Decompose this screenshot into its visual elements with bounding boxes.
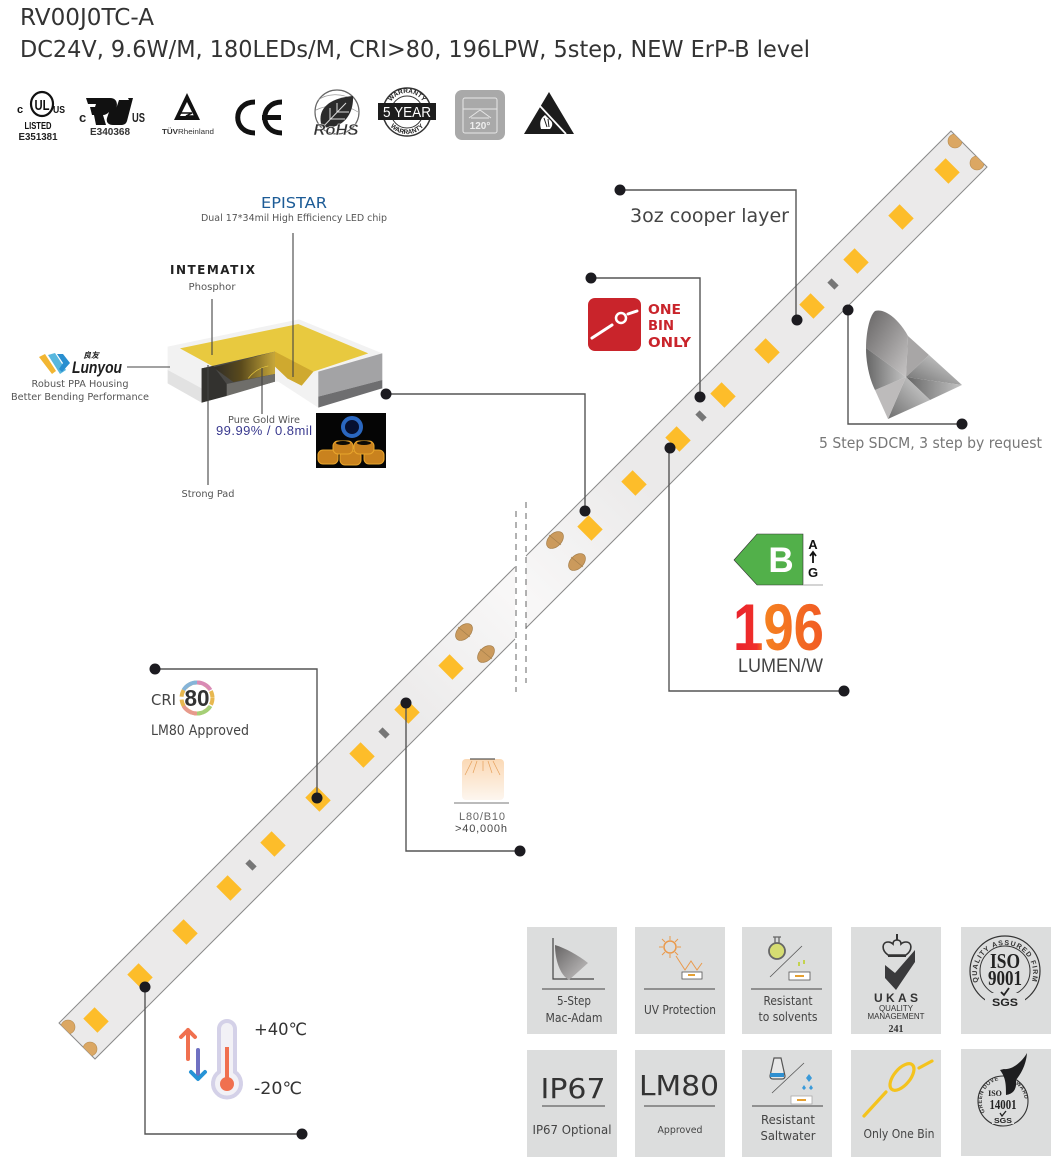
label: Phosphor: Phosphor: [188, 282, 236, 293]
tile: UKAS: [851, 927, 941, 1035]
icon: cRU recognized: US: [132, 110, 145, 125]
callout: LED package cutaway connector: [380, 388, 590, 516]
icon: CE mark: [238, 102, 282, 133]
callout: 3oz copper layer: [614, 184, 802, 326]
callout: lifetime L80/B10: L80/B10: [459, 811, 505, 823]
callout: one bin only: [586, 272, 706, 402]
icon: CRI color ring: [182, 682, 212, 714]
tile: UKAS: UKAS: [874, 991, 918, 1005]
icon: 5 year warranty: WARRANTY: [388, 88, 426, 101]
LED package drawing: [168, 319, 382, 408]
tile: ISO 14001: ISO: [988, 1089, 1002, 1098]
callout: lifetime L80/B10: [400, 698, 526, 856]
tile: IP67: IP67: [540, 1072, 606, 1105]
tile: ISO 14001: GREEN DOVE: [978, 1077, 998, 1114]
tile: IP67: [527, 1050, 617, 1157]
tile: LM80: Approved: [658, 1125, 702, 1136]
label: PPA housing: Robust PPA Housing: [32, 379, 128, 390]
tile: ISO 14001: [961, 1049, 1051, 1156]
icon: cUL listed: E351381: [18, 131, 58, 143]
icon: 5 year warranty: WARRANTY: [391, 123, 422, 134]
icon: energy class B label: [734, 534, 823, 585]
icon: cUL listed: [17, 92, 65, 143]
tile: UKAS: QUALITY: [879, 1004, 914, 1013]
tile: LM80: [635, 1050, 725, 1157]
label: LED chip: Dual 17*34mil High Efficiency LED chip: [201, 213, 387, 224]
logo: Lunyou: [39, 350, 122, 377]
stat: 196: 196: [733, 590, 824, 664]
tiles: feature grid: [527, 927, 1051, 1157]
icon: TUV Rheinland: TÜVRheinland: [162, 127, 214, 136]
callout: operating temperature: +40℃: [254, 1020, 307, 1040]
icon: energy class B label: B: [768, 541, 794, 580]
tile: UKAS: 241: [888, 1024, 904, 1035]
icon: cRU recognized: E340368: [90, 126, 130, 138]
icon: RoHS leaf: RoHS: [314, 122, 359, 139]
image: gold wire spools: [316, 413, 386, 468]
tile: ISO 9001: 9001: [988, 966, 1022, 990]
icon: 5 year warranty: 5 YEAR: [383, 104, 431, 121]
icon: 5 year warranty: [378, 87, 436, 137]
callout: operating temperature: -20℃: [254, 1079, 302, 1099]
tile: resistant saltwater: Resistant: [761, 1113, 815, 1127]
tile: resistant saltwater: [742, 1050, 832, 1157]
icon: RoHS leaf: [314, 90, 359, 139]
icon: light beam box: [462, 759, 504, 800]
label: strong pad: Strong Pad: [182, 489, 234, 500]
icon: TUV Rheinland: [162, 93, 214, 136]
tile: 5-step MacAdam: [527, 927, 617, 1034]
tile: UV protection: UV Protection: [644, 1003, 716, 1017]
icon: one bin red badge: [588, 298, 641, 351]
cut point solder pads: [452, 528, 589, 666]
callout: operating temperature: [140, 982, 308, 1140]
icon: cRU recognized: [79, 98, 145, 138]
tile: ISO 9001: SGS: [992, 997, 1018, 1009]
tile: 5-step MacAdam: Mac-Adam: [546, 1011, 602, 1025]
tile: ISO 9001: QUALITY ASSURED FIRM: [972, 940, 1038, 982]
strip body upper segment: [526, 131, 987, 628]
unit: lumen per watt: LUMEN/W: [738, 656, 823, 677]
icon: thermometer: [213, 1021, 241, 1097]
LED chips: [83, 158, 960, 1033]
callout: SDCM color steps: 5 Step SDCM, 3 step by request: [819, 434, 1042, 452]
label: Epistar: EPISTAR: [261, 194, 327, 212]
icon: energy class B label: A: [808, 537, 818, 552]
end solder pads: [61, 134, 984, 1056]
tile: 5-step MacAdam: 5-Step: [557, 994, 591, 1008]
icon: 120 degree beam angle: [455, 90, 505, 140]
tile: ISO 14001: SGS: [994, 1116, 1012, 1125]
strip body lower segment: [59, 567, 515, 1059]
tile: IP67: IP67 Optional: [532, 1123, 612, 1137]
icon: cRU recognized: c: [79, 110, 86, 125]
label: bending performance: Better Bending Performance: [11, 392, 149, 403]
icon: energy class B label: G: [808, 565, 818, 580]
tile: resistant to solvents: to solvents: [758, 1010, 818, 1024]
logo: Lunyou: 良友: [83, 350, 100, 361]
callout: 3oz copper layer: 3oz cooper layer: [630, 205, 789, 227]
label: gold wire purity: 99.99% / 0.8mil: [216, 423, 312, 438]
callout: SDCM color steps: [819, 304, 1042, 452]
callout: one bin only: ONE: [648, 302, 681, 318]
tile: resistant saltwater: Saltwater: [760, 1129, 816, 1143]
tile: only one bin: [851, 1050, 941, 1157]
leader lines: [127, 233, 293, 485]
tile: only one bin: Only One Bin: [864, 1127, 934, 1141]
tile: ISO 9001: ISO: [990, 949, 1020, 973]
icon: 120 degree beam angle: 120°: [470, 121, 490, 132]
tile: resistant to solvents: Resistant: [764, 994, 813, 1008]
callout: CRI 80: CRI: [151, 691, 176, 709]
subtitle: specification line: DC24V, 9.6W/M, 180LEDs/M, CRI>80, 196LPW, 5step, NEW ErP-B level: [20, 37, 810, 63]
label: Intematix: INTEMATIX: [170, 263, 256, 277]
tile: ISO 9001: [961, 927, 1051, 1034]
tile: UKAS: MANAGEMENT: [868, 1012, 925, 1021]
label: gold wire: Pure Gold Wire: [228, 415, 300, 426]
icon: cUL listed: c: [17, 104, 23, 116]
logo: Lunyou: Lunyou: [72, 358, 122, 377]
tile: resistant to solvents: [742, 927, 832, 1034]
callout: CRI 80: LM80 Approved: [151, 723, 249, 739]
callout: CRI 80: 80: [184, 685, 210, 711]
icon: ESD warning: [524, 92, 574, 134]
icon: up and down arrows: [181, 1030, 205, 1079]
tile: ISO 14001: 14001: [990, 1098, 1016, 1113]
title: model number: RV00J0TC-A: [20, 5, 154, 31]
callout: efficacy: [664, 442, 850, 696]
strip outline: [59, 131, 987, 1059]
callout: one bin only: ONLY: [648, 335, 691, 351]
resistors: [245, 278, 839, 871]
callout: one bin only: BIN: [648, 318, 674, 334]
tile: LM80: LM80: [639, 1069, 719, 1102]
callout: CRI 80: [150, 664, 322, 804]
tile: UV protection: [635, 927, 725, 1034]
icon: cUL listed: UL: [34, 97, 50, 114]
callout: lifetime L80/B10: >40,000h: [455, 823, 507, 835]
tile: ISO 14001: AWARD: [1016, 1082, 1028, 1098]
certification icons row: [17, 87, 574, 143]
chart: chromaticity wedge: [866, 310, 962, 419]
panel: LED package cross-section: [11, 194, 387, 500]
icon: cUL listed: US: [53, 105, 65, 116]
cut line dashes: [516, 502, 526, 692]
LED strip: [59, 131, 987, 1059]
icon: cUL listed: LISTED: [24, 121, 52, 132]
